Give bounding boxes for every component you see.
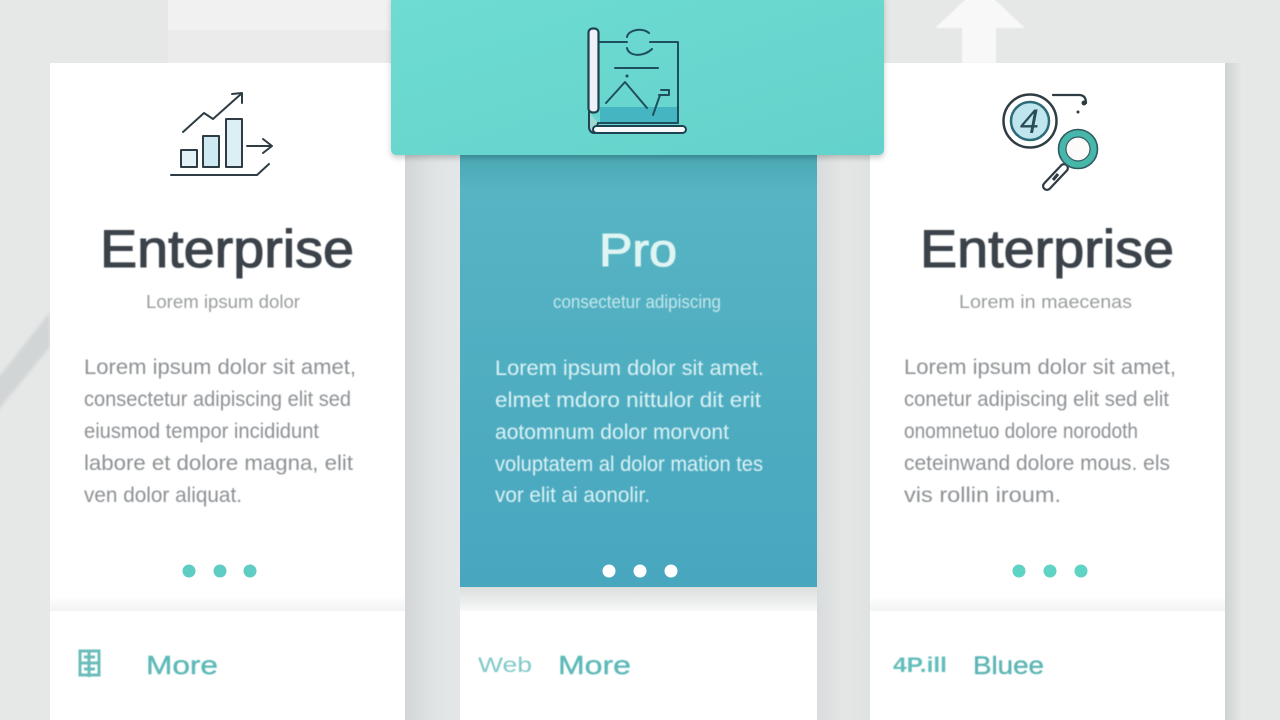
heading: Enterprise: Enterprise <box>920 220 1174 279</box>
body text: voluptatem al dolor mation tes <box>495 453 763 476</box>
body text: eiusmod tempor incididunt <box>84 420 319 443</box>
icon: magnifier and coin <box>1004 94 1098 186</box>
body text: ven dolor aliquat. <box>84 484 242 507</box>
heading: Pro: Pro <box>599 224 677 276</box>
decorative up arrow <box>935 0 1025 63</box>
subheading: Lorem in maecenas <box>959 292 1132 312</box>
body text: ceteinwand dolore mous. els <box>904 452 1170 475</box>
body text: labore et dolore magna, elit <box>84 452 353 475</box>
panel: centre Pro card <box>460 155 817 720</box>
subheading: consectetur adipiscing <box>553 292 721 312</box>
body text <box>904 356 1176 507</box>
body text: Lorem ipsum dolor sit amet, <box>904 356 1176 379</box>
body text: Lorem ipsum dolor sit amet, <box>84 356 356 379</box>
icon: drafting blueprint <box>588 28 686 133</box>
footer label: More: More <box>146 650 218 680</box>
body text: elmet mdoro nittulor dit erit <box>495 389 761 412</box>
pagination dots <box>602 564 678 578</box>
panel: right Enterprise card <box>870 63 1225 720</box>
body text: onomnetuo dolore norodoth <box>904 420 1138 443</box>
body text <box>495 357 764 507</box>
subheading: Lorem ipsum dolor <box>146 292 300 312</box>
gutter strips <box>405 63 1241 720</box>
footer icon label: Web: Web <box>478 654 532 677</box>
body text: vor elit ai aonolir. <box>495 484 650 507</box>
pagination dots <box>1012 564 1088 578</box>
icon: magnifier and coin: 4 <box>1020 103 1039 141</box>
pagination dots <box>182 564 256 578</box>
footer icon label: 4P.ill <box>893 654 947 677</box>
body text: consectetur adipiscing elit sed <box>84 388 351 411</box>
body text <box>84 356 356 507</box>
footer icon <box>79 650 100 677</box>
body text: conetur adipiscing elit sed elit <box>904 388 1169 411</box>
footer label: More: More <box>558 650 631 680</box>
panel: top teal header <box>391 0 884 155</box>
footer label: Blue: Bluee <box>973 652 1044 680</box>
panel: left Enterprise card <box>50 63 405 720</box>
body text: Lorem ipsum dolor sit amet. <box>495 357 764 380</box>
heading: Enterprise: Enterprise <box>100 220 354 279</box>
body text: vis rollin iroum. <box>904 484 1061 507</box>
icon: bar chart with arrows <box>171 93 272 175</box>
body text: aotomnum dolor morvont <box>495 421 729 444</box>
